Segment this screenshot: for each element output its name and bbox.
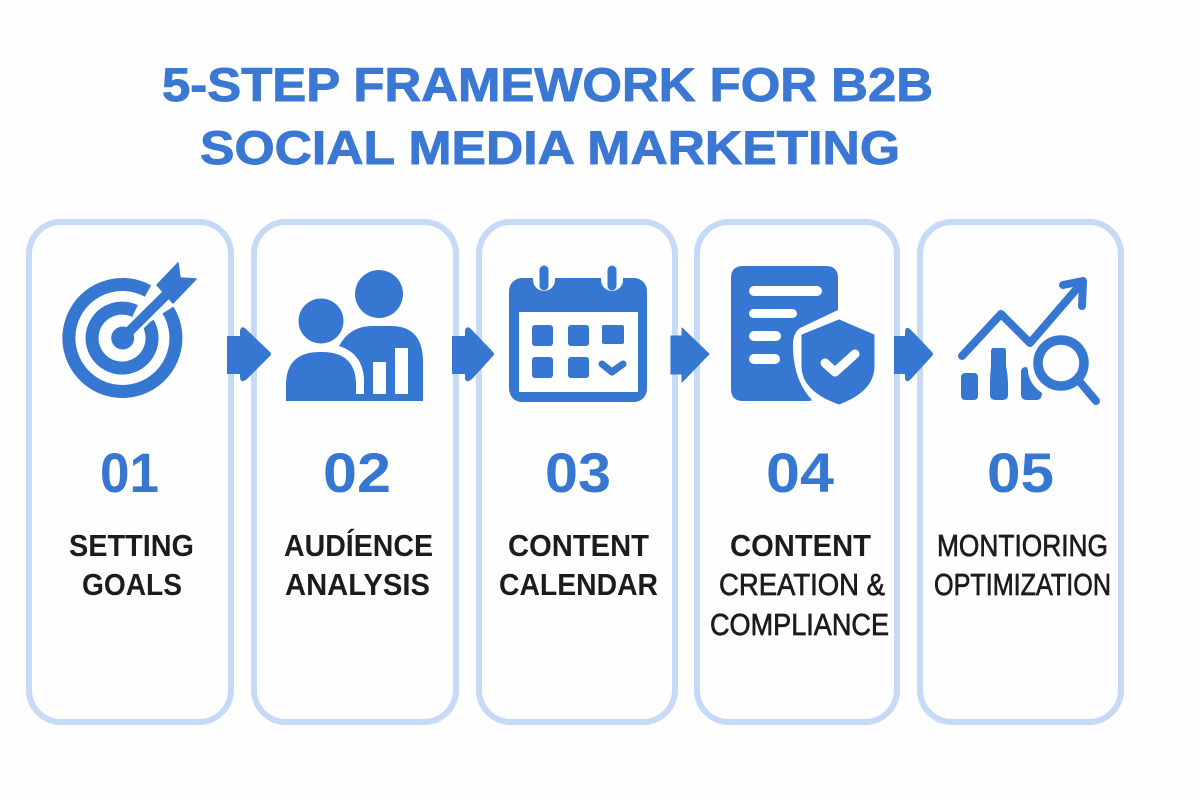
number 05: 05: [987, 441, 1054, 504]
label: setting goals: SETTING: [69, 528, 194, 563]
icon: document with shield: [731, 266, 874, 404]
icon: target with arrow: [69, 263, 196, 391]
arrow: step 2 to 3: [452, 327, 494, 381]
label: setting goals: [69, 528, 194, 602]
panel: step 5 monitoring optimization: [920, 222, 1121, 722]
panel: step 1 setting goals: [29, 222, 231, 722]
panel: step 3 content calendar: [479, 222, 675, 722]
panel: step 4 content creation and compliance: [697, 222, 897, 722]
title: 5-STEP FRAMEWORK FOR B2B: [162, 58, 933, 111]
label: setting goals: GOALS: [82, 567, 182, 602]
arrow: step 1 to 2: [227, 327, 271, 381]
label: audience analysis: [284, 528, 433, 602]
label: content calendar: [499, 528, 658, 602]
number 03: 03: [545, 441, 611, 504]
number 02: 02: [323, 441, 391, 504]
label: content creation and compliance: [710, 528, 889, 642]
label: content creation and compliance: CREATION &: [719, 567, 885, 602]
label: audience analysis: ANALYSIS: [285, 567, 430, 602]
title: [162, 58, 933, 174]
label: monitoring optimization: [934, 528, 1111, 602]
label: audience analysis: AUDÍENCE: [284, 528, 433, 563]
label: content creation and compliance: CONTENT: [730, 528, 871, 563]
number 01: 01: [100, 441, 159, 504]
number 04: 04: [766, 441, 834, 504]
icon: audience with bars: [286, 270, 423, 401]
panel: step 2 audience analysis: [254, 222, 456, 722]
icon: growth chart with magnifier: [961, 281, 1096, 401]
arrow: step 4 to 5: [894, 328, 933, 381]
label: content creation and compliance: COMPLIANCE: [710, 607, 889, 642]
icon: calendar: [509, 265, 647, 402]
label: content calendar: CONTENT: [508, 528, 649, 563]
label: monitoring optimization: MONTIORING: [937, 528, 1108, 563]
label: monitoring optimization: OPTIMIZATION: [934, 567, 1111, 602]
label: content calendar: CALENDAR: [499, 567, 658, 602]
title: SOCIAL MEDIA MARKETING: [200, 121, 900, 174]
arrow: step 3 to 4: [671, 328, 709, 382]
